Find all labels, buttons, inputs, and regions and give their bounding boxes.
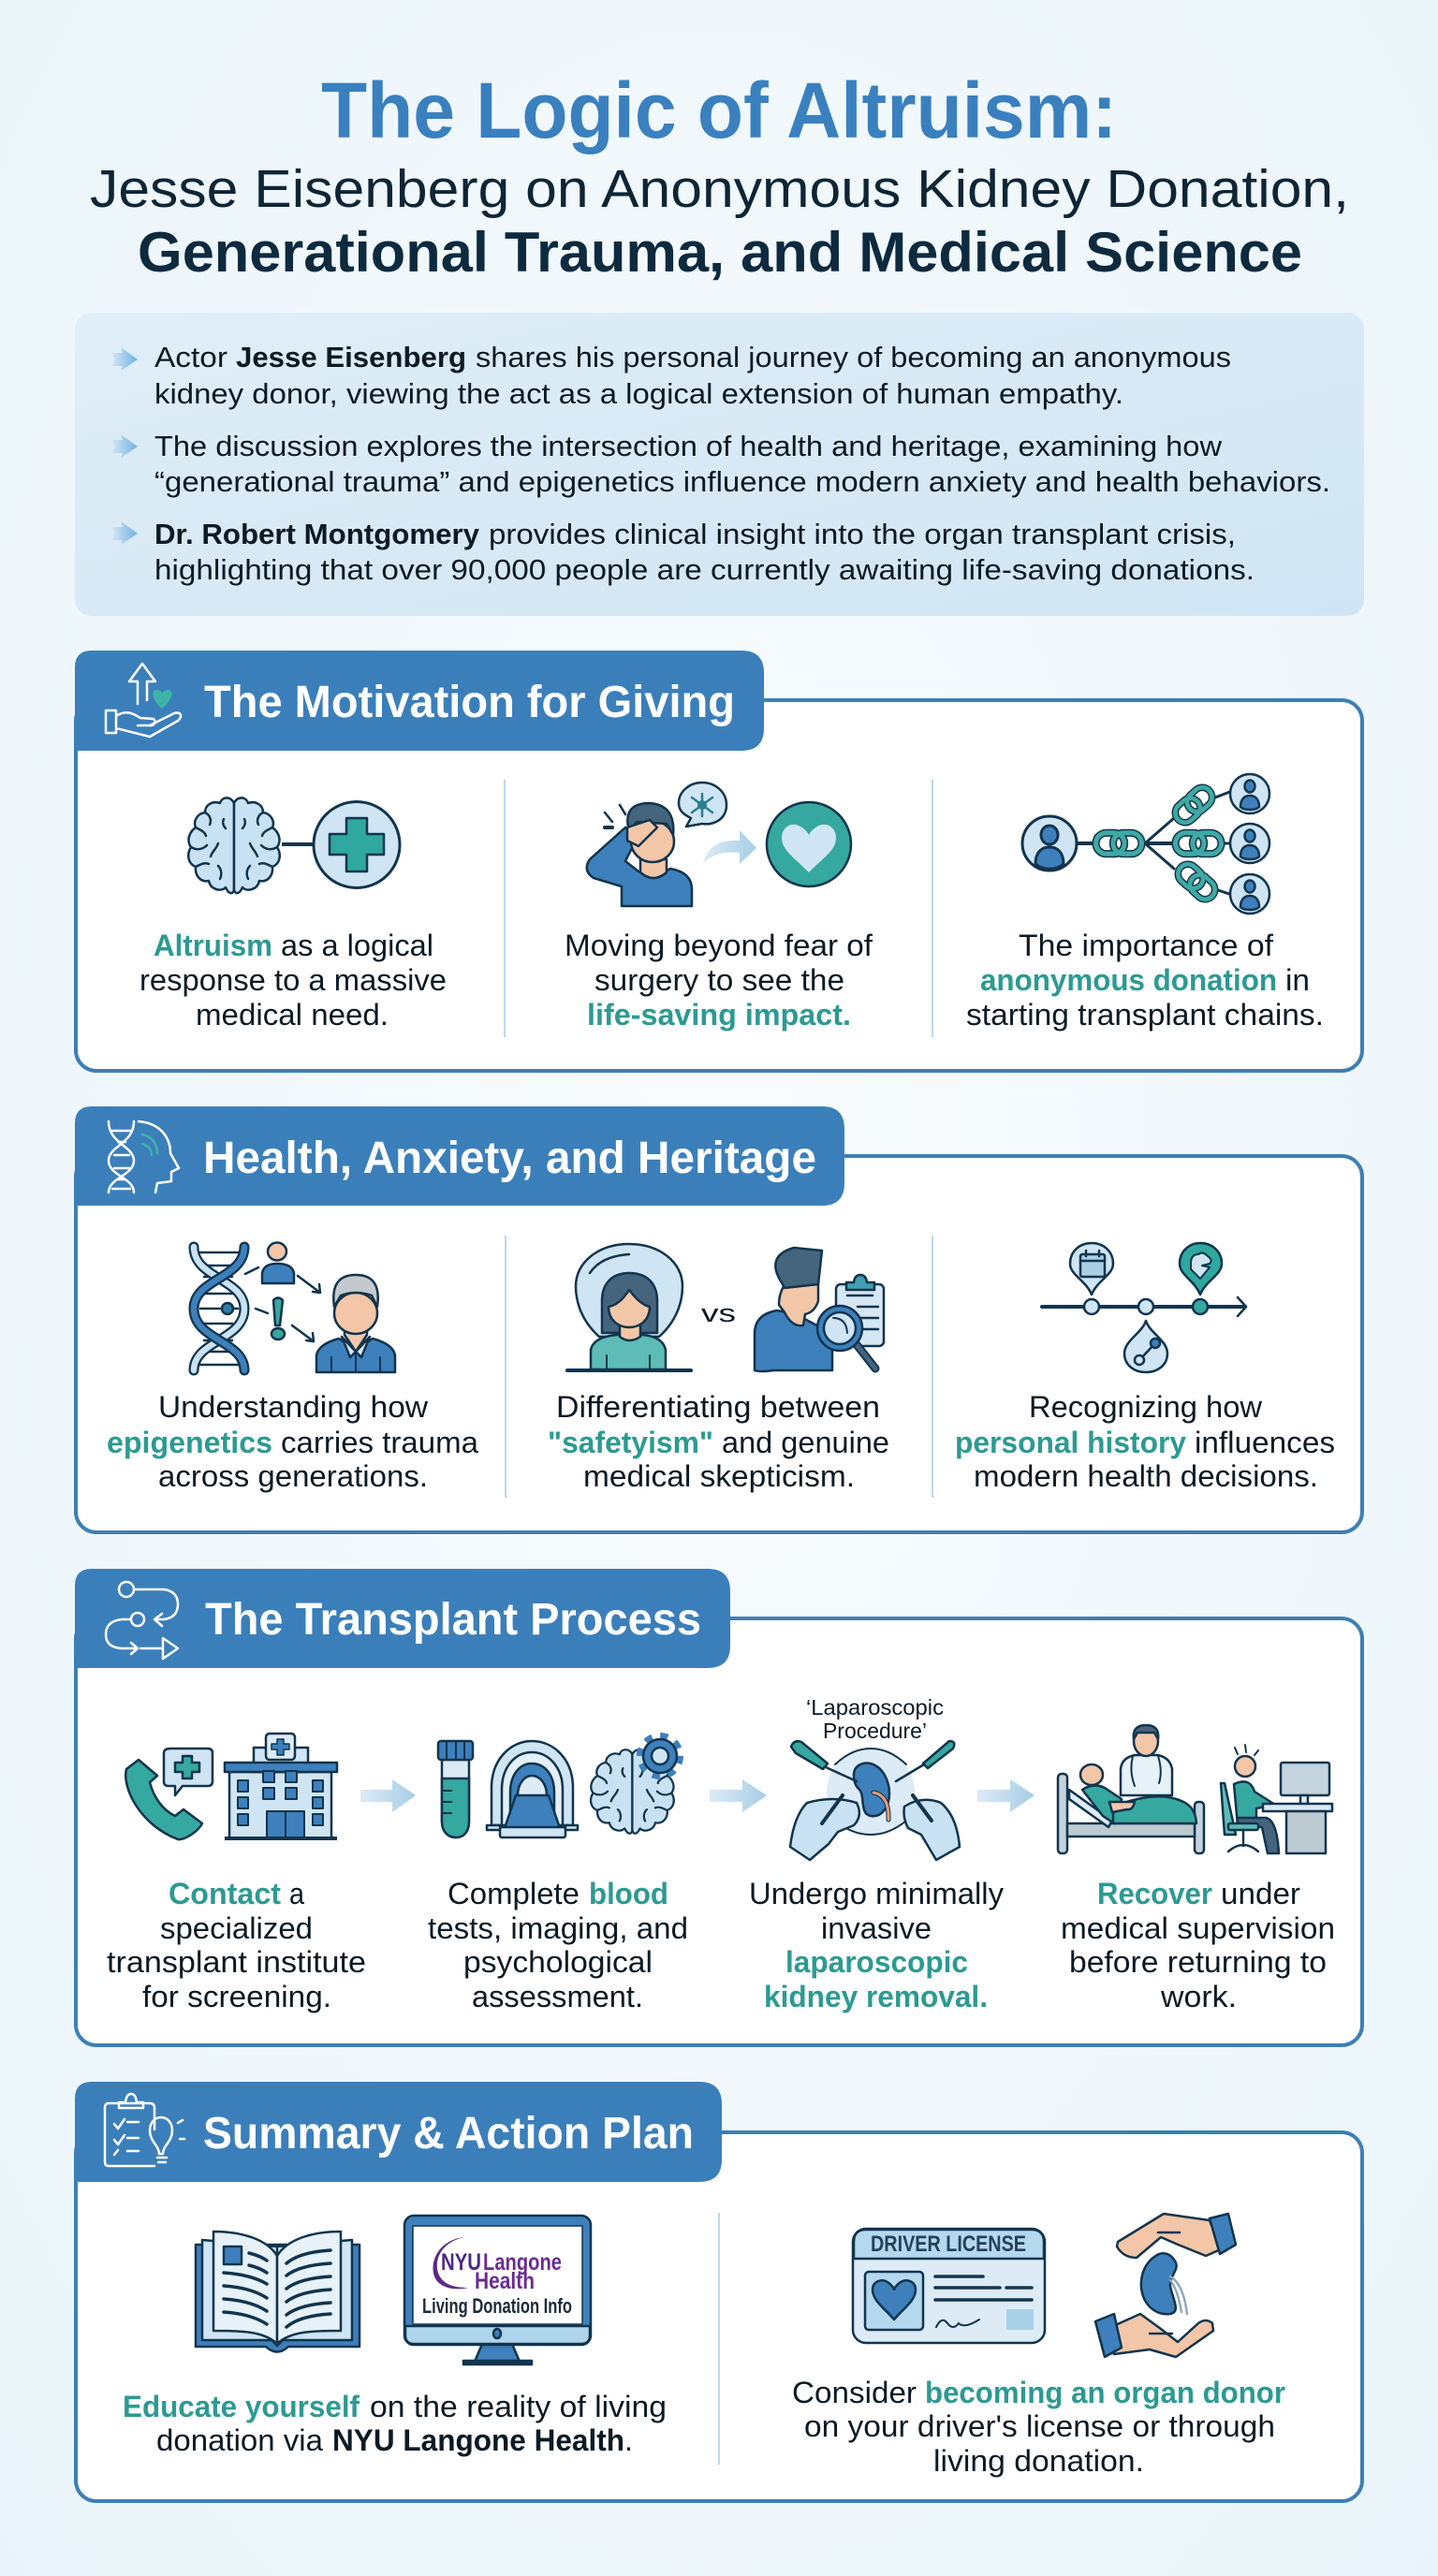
text: personal history: modern health decisions. (974, 1459, 1318, 1493)
icon: phone and medical speech bubble (125, 1749, 213, 1839)
text: safetyism: Differentiating between (556, 1390, 880, 1424)
text: anonymous donation: anonymous donation (980, 963, 1277, 997)
icon: monitor with NYU Langone Health page: Living Donation Info (422, 2294, 572, 2318)
icon: MRI scanner (487, 1741, 578, 1837)
section header tab: The Transplant Process (205, 1595, 701, 1645)
text: safetyism (548, 1390, 889, 1493)
text: safetyism: medical skepticism. (583, 1459, 855, 1493)
divider 1 (504, 780, 506, 1037)
text: step 2: assessment. (472, 1980, 643, 2013)
text: personal history: influences (1195, 1426, 1335, 1459)
title: The Logic of Altruism: (321, 66, 1117, 154)
section header tab: Summary & Action Plan (203, 2109, 694, 2159)
text: altruism (139, 929, 447, 1032)
icon: DNA passing trauma to a man (194, 1243, 395, 1372)
text: step 2: Complete (448, 1877, 580, 1910)
section header tab: The Motivation for Giving (204, 678, 735, 727)
text: epigenetics: epigenetics (107, 1426, 272, 1459)
text: moving beyond fear: surgery to see the (594, 963, 844, 997)
arrow 1 (360, 1779, 416, 1812)
bullet 1: Actor (154, 341, 227, 373)
text: step 3: Undergo minimally (749, 1877, 1004, 1910)
icon: driver license card (853, 2229, 1045, 2343)
text: anonymous donation: starting transplant chains. (966, 998, 1324, 1032)
text: altruism: as a logical (281, 929, 433, 962)
section header tab: Health, Anxiety, and Heritage (203, 1134, 816, 1183)
text: moving beyond fear: Moving beyond fear of (565, 929, 873, 962)
arrow 2 (710, 1779, 767, 1812)
icon: person in safety bubble versus skeptical man: vs (701, 1299, 736, 1327)
icon: process flow (106, 1582, 178, 1659)
text: step 2: blood (589, 1877, 668, 1910)
title: Generational Trauma, and Medical Science (138, 221, 1302, 284)
section header tab (75, 2082, 722, 2182)
text: step 3: invasive (821, 1911, 932, 1945)
icon: monitor with NYU Langone Health page: Langone (483, 2249, 562, 2276)
bullet 3: Dr. Robert Montgomery (154, 518, 480, 550)
bullet 1 (111, 341, 1231, 410)
icon: laparoscopic procedure (790, 1695, 960, 1860)
text: become an organ donor: becoming an organ donor (925, 2376, 1285, 2409)
icon: laparoscopic procedure: ‘Laparoscopic (806, 1695, 944, 1720)
text: personal history: personal history (955, 1426, 1186, 1459)
text: altruism: Altruism (154, 929, 272, 962)
text: step 1 (107, 1877, 366, 2013)
panel: The Motivation for Giving (75, 651, 1362, 1071)
icon: driver license card: DRIVER LICENSE (871, 2232, 1026, 2257)
text: step 1: Contact (169, 1877, 281, 1910)
icon: transplant chain network (1022, 774, 1269, 914)
text: epigenetics: across generations. (158, 1459, 428, 1493)
title: Jesse Eisenberg on Anonymous Kidney Donation, (90, 159, 1349, 219)
bullet 3: provides clinical insight into the organ transplant crisis, (489, 518, 1236, 550)
panel: Health, Anxiety, and Heritage (75, 1106, 1362, 1532)
text: become an organ donor: Consider (792, 2376, 917, 2409)
icon: monitor with NYU Langone Health page: Health (475, 2268, 535, 2294)
arrow 3 (977, 1779, 1034, 1812)
bullet 3: highlighting that over 90,000 people are currently awaiting life-saving donations. (154, 553, 1255, 586)
bullet 2 (111, 430, 1330, 498)
text: step 3: laparoscopic (785, 1945, 968, 1979)
bullet 1: kidney donor, viewing the act as a logical extension of human empathy. (154, 377, 1123, 410)
text: epigenetics (107, 1390, 478, 1493)
text: step 1: a (289, 1877, 304, 1910)
divider (718, 2213, 720, 2465)
icon: brain with gear (591, 1736, 680, 1834)
icon: checklist and light bulb (105, 2094, 184, 2166)
text: step 4: under (1221, 1877, 1300, 1910)
icon: brain linked to medical cross (188, 798, 400, 893)
icon: monitor with NYU Langone Health page: NYU (441, 2249, 481, 2276)
bullet 2: “generational trauma” and epigenetics influence modern anxiety and health behaviors. (154, 465, 1330, 498)
text: anonymous donation: The importance of (1019, 929, 1273, 962)
text: epigenetics: Understanding how (158, 1390, 429, 1424)
text: become an organ donor (792, 2376, 1285, 2478)
text: step 1: specialized (160, 1911, 313, 1945)
icon: monitor with NYU Langone Health page (404, 2216, 591, 2364)
text: educate yourself: NYU Langone Health (332, 2423, 624, 2457)
text: step 4: before returning to (1069, 1945, 1327, 1979)
panel: Summary & Action Plan (75, 2082, 1362, 2501)
text: step 4: work. (1160, 1980, 1237, 2013)
text: step 1: transplant institute (107, 1945, 366, 1979)
text: personal history (955, 1390, 1335, 1493)
icon: person in safety bubble versus skeptical man (567, 1244, 884, 1371)
text: step 4: medical supervision (1061, 1911, 1335, 1945)
icon: open book (196, 2232, 360, 2351)
section header tab (75, 651, 764, 751)
text: step 4 (1061, 1877, 1335, 2013)
icon: laparoscopic procedure: Procedure’ (823, 1719, 927, 1743)
text: educate yourself: . (624, 2423, 633, 2457)
text: anonymous donation (966, 929, 1324, 1032)
text: become an organ donor: living donation. (933, 2444, 1144, 2478)
text: safetyism: "safetyism" (548, 1426, 713, 1459)
text: educate yourself: donation via (156, 2423, 323, 2457)
text: anonymous donation: in (1285, 963, 1310, 997)
bullet 3 (111, 518, 1255, 586)
text: personal history: Recognizing how (1029, 1390, 1263, 1424)
bullet 1: shares his personal journey of becoming an anonymous (476, 341, 1231, 373)
icon: giving hand with arrow and heart (106, 664, 181, 737)
text: become an organ donor: on your driver's license or through (804, 2409, 1275, 2443)
bullet 1: Jesse Eisenberg (236, 341, 466, 373)
icon: fearful person moving toward heart (587, 783, 851, 906)
icon: doctor and recovering patient (1058, 1725, 1332, 1853)
text: step 3: kidney removal. (764, 1980, 988, 2013)
text: safetyism: and genuine (722, 1426, 889, 1459)
panel: The Transplant Process (75, 1569, 1362, 2045)
text: altruism: response to a massive (139, 963, 447, 997)
divider 2 (932, 780, 933, 1037)
icon: test tube (438, 1741, 473, 1837)
text: step 3 (749, 1877, 1004, 2013)
text: epigenetics: carries trauma (281, 1426, 478, 1459)
divider 1 (505, 1236, 506, 1498)
title (90, 66, 1349, 284)
text: educate yourself: Educate yourself (123, 2390, 360, 2423)
section header tab (75, 1569, 730, 1668)
text: step 2: psychological (463, 1945, 653, 1979)
section header tab (75, 1106, 844, 1206)
text: educate yourself: on the reality of living (370, 2390, 667, 2423)
text: step 2 (428, 1877, 688, 2013)
icon: life timeline (1042, 1243, 1246, 1372)
divider 2 (932, 1236, 933, 1498)
text: moving beyond fear (565, 929, 873, 1032)
text: moving beyond fear: life-saving impact. (587, 998, 851, 1032)
text: step 1: for screening. (142, 1980, 331, 2013)
text: step 4: Recover (1097, 1877, 1212, 1910)
text: step 2: tests, imaging, and (428, 1911, 688, 1945)
text: educate yourself (123, 2390, 667, 2457)
panel: introduction summary (75, 313, 1364, 616)
icon: DNA and head (109, 1121, 179, 1193)
text: altruism: medical need. (196, 998, 389, 1032)
icon: hands holding kidney (1095, 2214, 1236, 2357)
icon: hospital (225, 1734, 337, 1838)
bullet 2: The discussion explores the intersection of health and heritage, examining how (154, 430, 1223, 462)
